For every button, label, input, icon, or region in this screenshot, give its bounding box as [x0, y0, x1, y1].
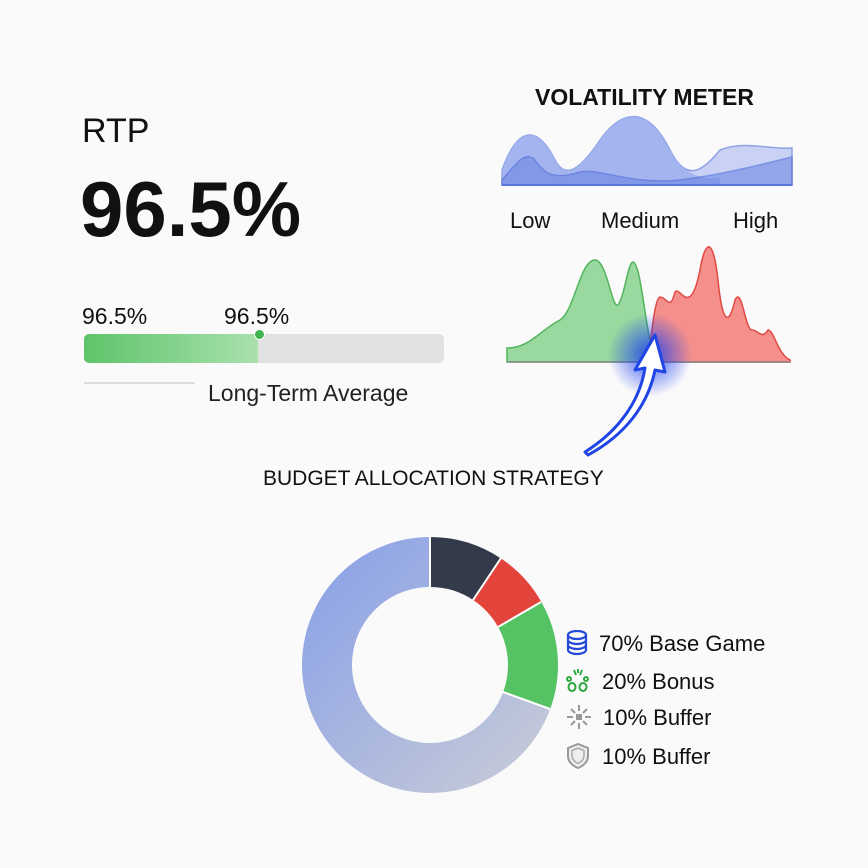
- volatility labels: [510, 208, 778, 233]
- legend item: buffer: 10% Buffer: [603, 705, 711, 730]
- progress bar: [84, 334, 444, 363]
- legend line: long-term average: [84, 382, 195, 384]
- arrow: [585, 335, 665, 455]
- heading: RTP: RTP: [82, 112, 149, 150]
- volatility labels: Medium: [601, 208, 679, 233]
- label: Long-Term Average: Long-Term Average: [208, 380, 408, 406]
- volatility labels: High: [733, 208, 778, 233]
- legend item: base game: 70% Base Game: [599, 631, 765, 656]
- heading: volatility meter: VOLATILITY METER: [535, 84, 754, 110]
- progress bar labels: 96.5%: [224, 303, 289, 329]
- legend item: bonus: 20% Bonus: [602, 669, 715, 694]
- progress bar labels: [82, 303, 289, 329]
- progress bar labels: 96.5%: [82, 303, 147, 329]
- big number: 96.5%: 96.5%: [80, 165, 301, 253]
- glow at intersection: [608, 313, 692, 397]
- legend item: buffer shield: 10% Buffer: [602, 744, 710, 769]
- volatility labels: Low: [510, 208, 550, 233]
- legend: donut: [566, 630, 765, 769]
- heading: budget allocation strategy: BUDGET ALLOCATION STRATEGY: [263, 467, 604, 490]
- donut chart: [327, 537, 550, 768]
- marker dot: [254, 329, 265, 340]
